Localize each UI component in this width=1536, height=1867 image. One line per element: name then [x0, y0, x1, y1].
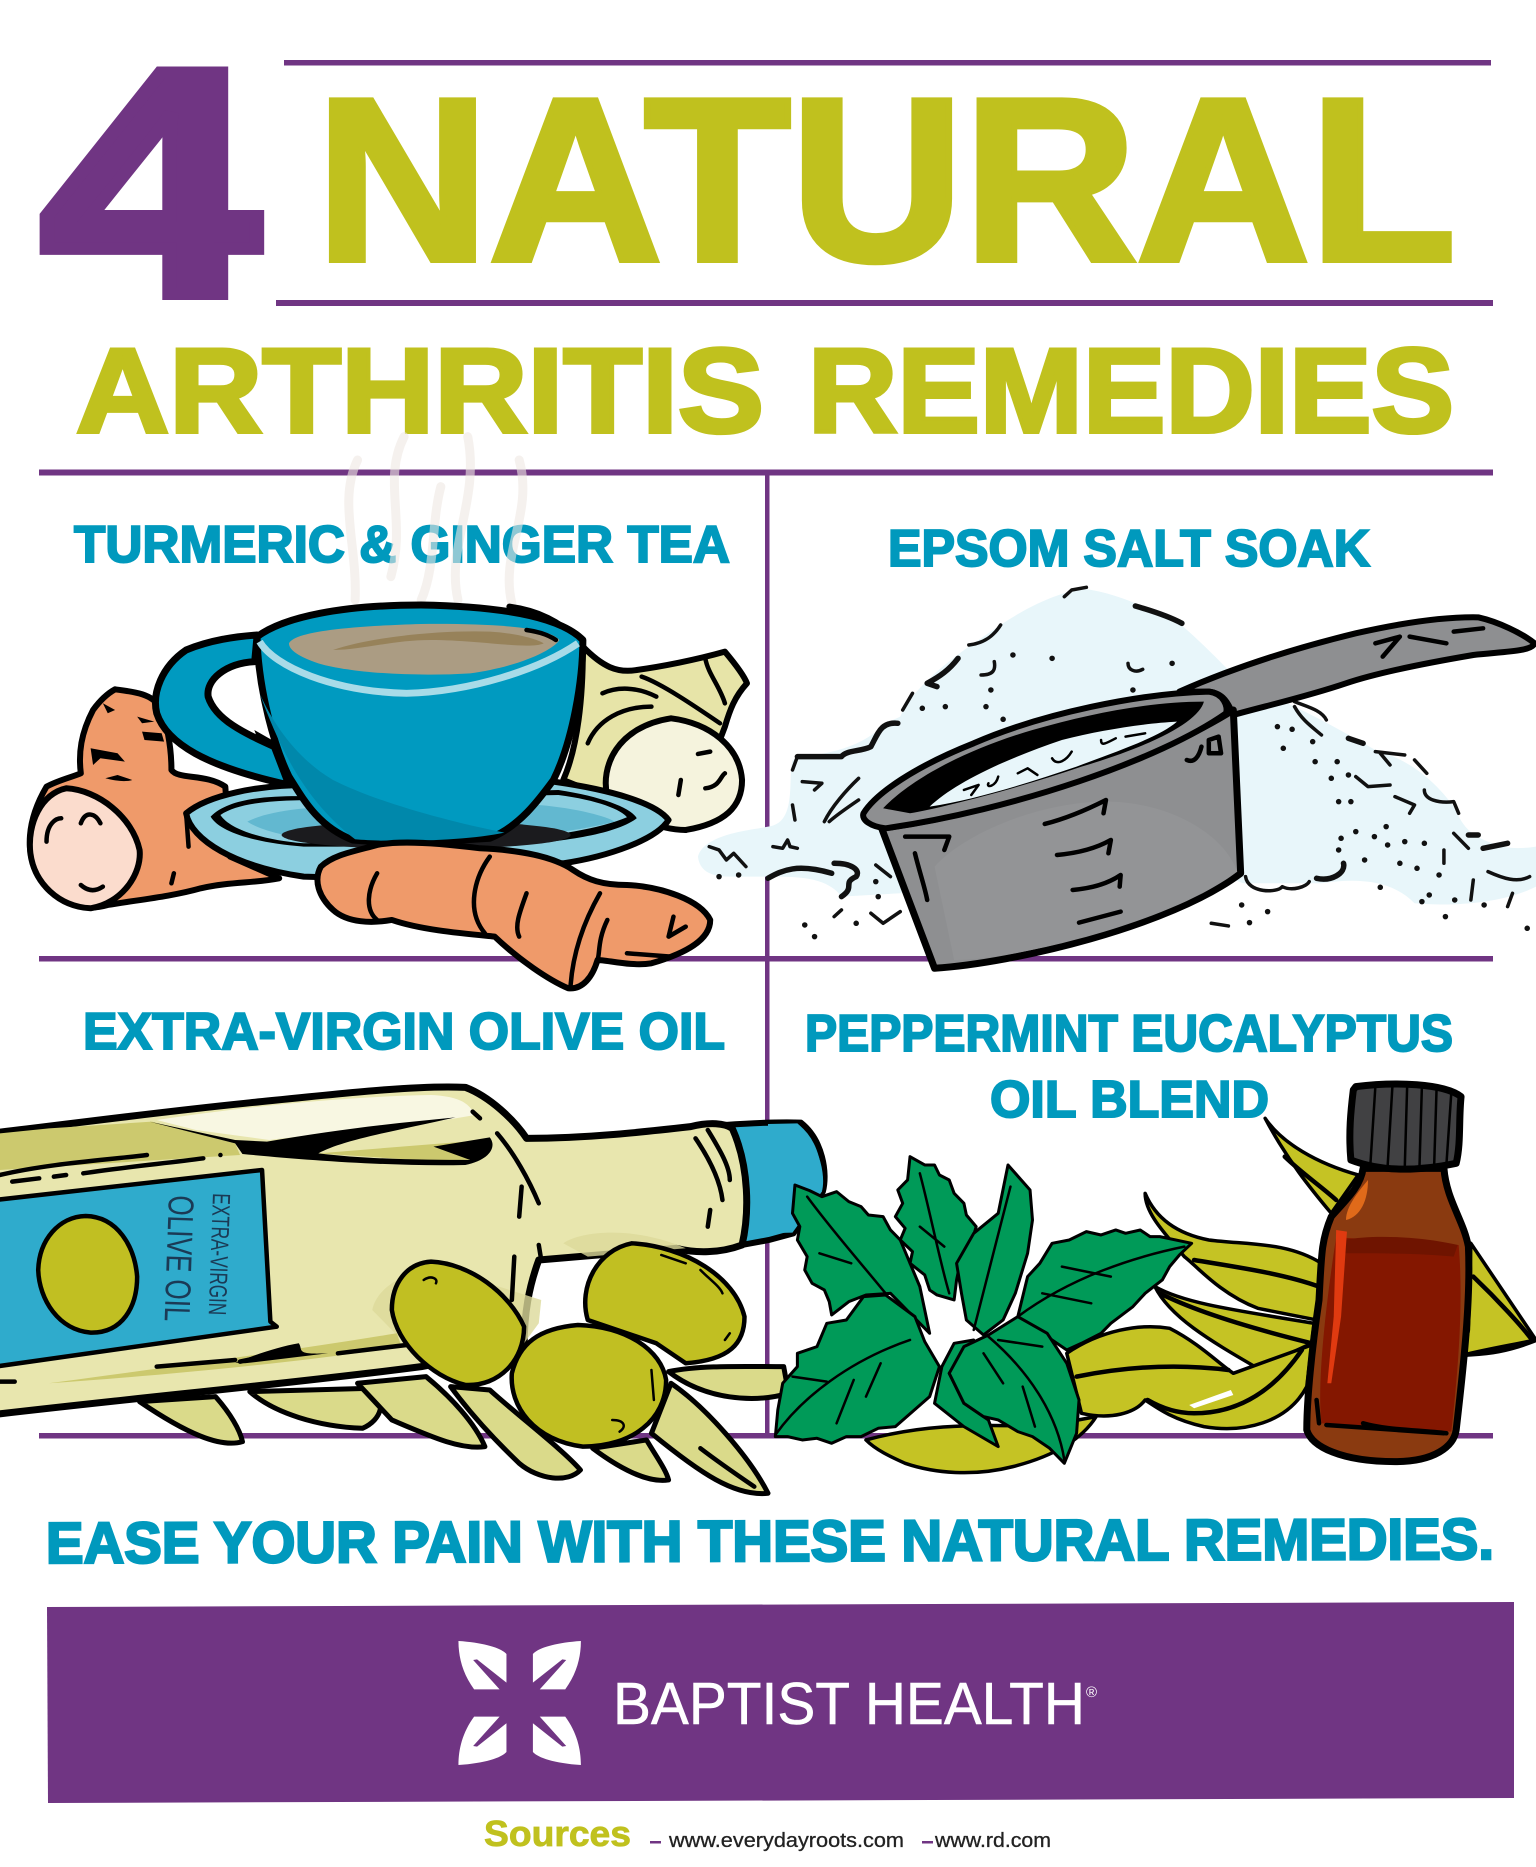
turmeric peeking through handle	[257, 733, 272, 742]
salt specks	[709, 587, 1530, 937]
banner background	[47, 1602, 1514, 1803]
illustration: epsom salt and measuring cup	[698, 587, 1536, 968]
illustration: turmeric and ginger tea	[30, 437, 747, 988]
registered mark: ®	[1086, 1684, 1097, 1701]
essential oil bottle	[1307, 1168, 1469, 1462]
label text: extra-virgin olive oil: OLIVE OIL	[157, 1195, 202, 1322]
bottle label	[0, 1170, 277, 1367]
olive leaves	[140, 1366, 789, 1494]
heading: peppermint eucalyptus oil blend	[805, 1005, 1453, 1129]
label text: extra-virgin olive oil: EXTRA-VIRGIN	[203, 1193, 235, 1316]
heading: peppermint eucalyptus oil blend: OIL BLEND	[990, 1071, 1269, 1129]
title word: natural: NATURAL	[316, 51, 1456, 310]
salt pile	[698, 588, 1536, 904]
heading: epsom salt soak: EPSOM SALT SOAK	[888, 520, 1370, 578]
big number 4: 4	[41, 4, 261, 363]
ginger root	[509, 607, 747, 830]
olive oil bottle	[0, 1087, 747, 1415]
title	[41, 4, 1456, 458]
bottle cap collar	[725, 1122, 825, 1245]
heading: peppermint eucalyptus oil blend: PEPPERMINT EUCALYPTUS	[805, 1005, 1453, 1063]
heading: turmeric and ginger tea: TURMERIC & GINGER TEA	[74, 516, 730, 574]
title line: arthritis remedies: REMEDIES	[808, 324, 1454, 458]
sources label: Sources	[484, 1813, 631, 1854]
turmeric root back	[30, 689, 279, 908]
measuring cup handle	[1179, 617, 1535, 715]
steam	[349, 437, 523, 603]
illustration: olive oil bottle and olives	[0, 1087, 825, 1494]
tea cup	[257, 605, 583, 842]
title line: arthritis remedies: ARTHRITIS	[76, 324, 764, 458]
source url: reader's digest: www.rd.com	[934, 1830, 1051, 1852]
title line: arthritis remedies	[76, 324, 1454, 458]
measuring cup body	[863, 692, 1241, 968]
saucer	[186, 782, 669, 877]
mint leaves	[775, 1157, 1192, 1463]
illustration: peppermint, eucalyptus and essential oil	[768, 1084, 1536, 1473]
eucalyptus leaves	[866, 1118, 1536, 1473]
sources	[484, 1813, 1051, 1854]
logo wordmark: BAPTIST HEALTH	[613, 1671, 1085, 1737]
heading: extra-virgin olive oil: EXTRA-VIRGIN OLIVE OIL	[83, 1003, 725, 1061]
source url: everyday roots: www.everydayroots.com	[668, 1830, 904, 1852]
blue collar end	[768, 1123, 823, 1233]
tagline: EASE YOUR PAIN WITH THESE NATURAL REMEDIES.	[46, 1507, 1494, 1576]
turmeric root front	[317, 842, 710, 988]
cup handle	[156, 635, 289, 785]
bottle cap	[1350, 1084, 1461, 1169]
olive fruit cluster	[392, 1243, 744, 1447]
label text: extra-virgin olive oil	[157, 1193, 235, 1322]
logo: four white leaves	[458, 1641, 581, 1765]
footer banner	[47, 1602, 1514, 1803]
